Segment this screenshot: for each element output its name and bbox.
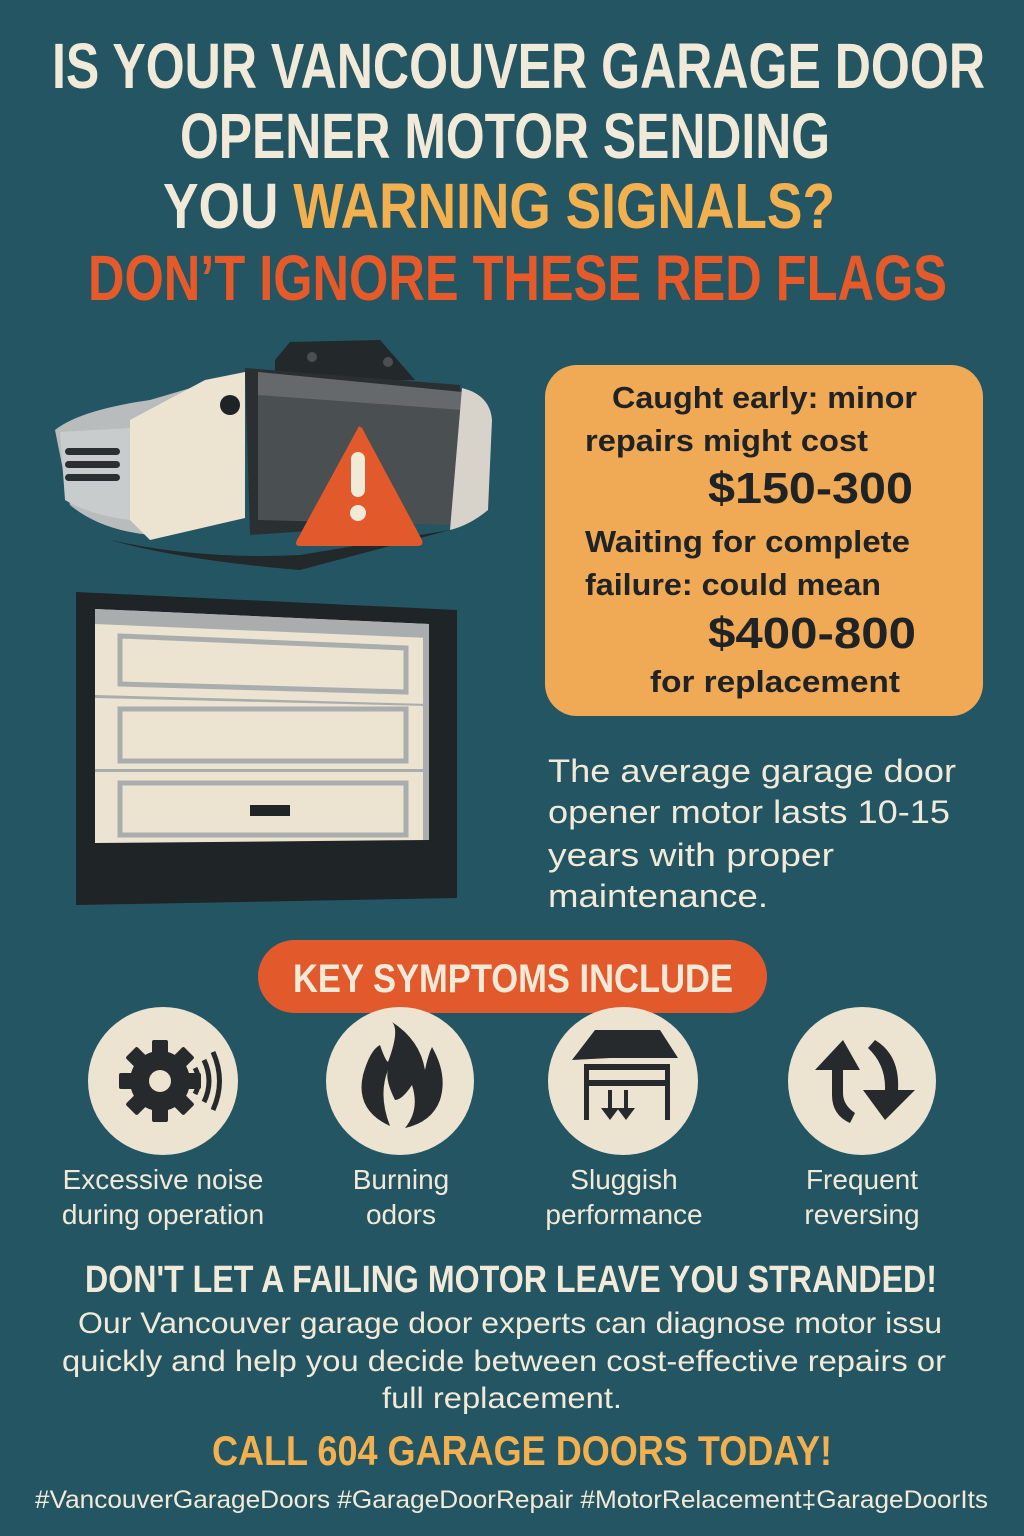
labels: symptoms <box>62 1164 920 1230</box>
text block: average lifespan: opener motor lasts 10-15 <box>548 794 950 830</box>
text block: service description: Our Vancouver garage door experts can diagnose motor issu <box>78 1307 942 1340</box>
icon: reversing arrows <box>788 1007 936 1155</box>
labels: symptoms: odors <box>366 1199 436 1230</box>
labels: symptoms: Frequent <box>806 1164 918 1195</box>
panel: cost callout: Waiting for complete <box>585 524 910 559</box>
labels: symptoms: Burning <box>353 1164 449 1195</box>
text block: average lifespan: years with proper <box>548 837 834 873</box>
text block: average lifespan: maintenance. <box>548 878 768 914</box>
panel: cost callout: Caught early: minor <box>612 380 917 415</box>
icon: gear with noise <box>88 1007 238 1155</box>
hashtags: #VancouverGarageDoors #GarageDoorRepair #MotorRelacement‡GarageDoorIts <box>35 1486 988 1514</box>
labels: symptoms: reversing <box>804 1199 920 1230</box>
labels: symptoms: Excessive noise <box>63 1164 263 1195</box>
icon: warning triangle <box>296 426 422 546</box>
panel: cost callout: repairs might cost <box>585 423 868 458</box>
icon: flame <box>326 1007 474 1155</box>
title: YOU WARNING SIGNALS? <box>163 170 835 242</box>
text block: service description: quickly and help you decide between cost-effective repairs or <box>62 1345 946 1378</box>
icon: garage with down arrows <box>548 1007 698 1155</box>
text block: average lifespan <box>548 753 956 914</box>
title <box>52 30 985 314</box>
panel: cost callout <box>545 365 983 716</box>
panel: cost callout: $400-800 <box>708 609 916 658</box>
text block: average lifespan: The average garage door <box>548 753 956 789</box>
panel: cost callout: for replacement <box>650 664 900 699</box>
call to action: CALL 604 GARAGE DOORS TODAY! <box>212 1427 832 1474</box>
panel: cost callout: $150-300 <box>708 464 913 513</box>
heading: key symptoms pill <box>258 940 767 1013</box>
text block: service description <box>62 1307 946 1415</box>
illustration: garage door <box>76 592 457 905</box>
title: OPENER MOTOR SENDING <box>180 100 830 172</box>
labels: symptoms: Sluggish <box>570 1164 678 1195</box>
labels: symptoms: performance <box>545 1199 703 1230</box>
labels: symptoms: during operation <box>62 1199 264 1230</box>
illustration: garage door opener motor with warning <box>55 340 492 570</box>
text block: service description: full replacement. <box>382 1382 622 1415</box>
panel: cost callout: failure: could mean <box>585 567 881 602</box>
heading: key symptoms pill: KEY SYMPTOMS INCLUDE <box>293 957 733 1001</box>
